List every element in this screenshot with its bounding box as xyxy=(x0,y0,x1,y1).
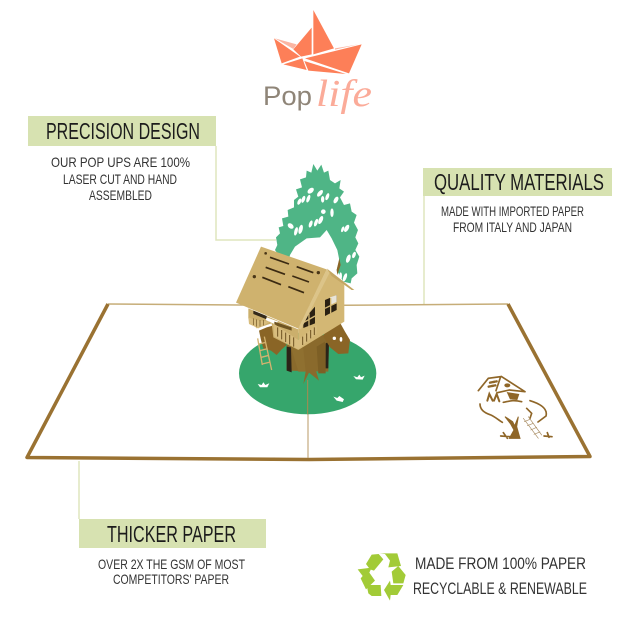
banner xyxy=(423,168,612,196)
icon: origami boat xyxy=(274,10,362,74)
recycling note xyxy=(358,553,587,601)
body text xyxy=(98,556,245,587)
recycling text xyxy=(413,554,587,598)
canopy outline xyxy=(480,401,546,422)
lower foliage xyxy=(259,325,287,355)
heading: PRECISION DESIGN xyxy=(46,118,200,144)
grass xyxy=(501,433,552,438)
card page xyxy=(26,304,591,459)
icon: recycle arrows xyxy=(358,553,406,601)
trunk xyxy=(287,333,329,384)
balcony railing xyxy=(273,323,317,349)
ladder xyxy=(523,417,542,438)
logo wordmark: life xyxy=(316,73,372,115)
pop-up treehouse: ground and canopy xyxy=(239,164,376,414)
house walls xyxy=(248,268,354,350)
body text: FROM ITALY AND JAPAN xyxy=(453,219,572,235)
body text: ASSEMBLED xyxy=(89,187,152,203)
house outline xyxy=(478,377,525,401)
trunk xyxy=(505,417,520,438)
banner xyxy=(79,519,266,548)
label: precision design xyxy=(28,116,216,203)
banner xyxy=(28,116,216,146)
icon: small treehouse cut-out xyxy=(478,377,552,438)
railing left xyxy=(248,317,270,328)
logo: Poplife xyxy=(263,10,372,115)
pop-up treehouse: house and trunk xyxy=(236,247,354,384)
heading: THICKER PAPER xyxy=(107,521,236,547)
ladder xyxy=(258,337,272,370)
label: thicker paper xyxy=(79,519,266,587)
card top edge xyxy=(108,304,508,306)
body text: OVER 2X THE GSM OF MOST xyxy=(98,556,245,572)
body text: OUR POP UPS ARE 100% xyxy=(51,154,190,170)
body text: COMPETITORS' PAPER xyxy=(113,571,229,587)
roof xyxy=(236,247,330,329)
card centre fold xyxy=(307,400,309,458)
body text: LASER CUT AND HAND xyxy=(63,171,177,187)
tree canopy xyxy=(275,164,359,283)
body text xyxy=(51,154,190,203)
connector lines xyxy=(79,146,424,519)
open card xyxy=(26,304,591,460)
logo wordmark: Pop xyxy=(263,81,312,111)
label: quality materials xyxy=(423,168,612,235)
body text xyxy=(441,203,584,235)
logo wordmark xyxy=(263,73,372,115)
card side and bottom edges xyxy=(27,304,590,460)
windows xyxy=(303,295,337,328)
grass cut-outs xyxy=(258,375,365,402)
ground circle xyxy=(239,332,376,414)
